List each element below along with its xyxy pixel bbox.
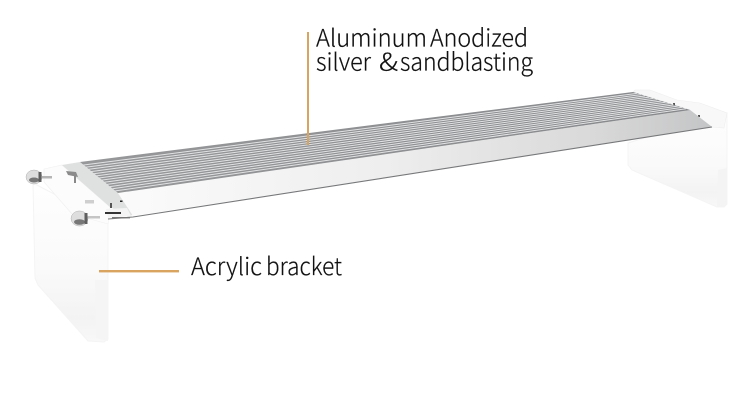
lamp: bottom edge xyxy=(108,127,712,219)
callout text: acrylic bracket: bracket xyxy=(266,247,343,282)
icon: left front screw xyxy=(71,211,100,226)
lamp: left clamp details xyxy=(66,171,131,218)
lamp body xyxy=(62,92,712,219)
callout line: bracket xyxy=(99,270,179,272)
icon: left rear screw xyxy=(26,170,52,184)
callout text: aluminum anodized: Aluminum xyxy=(316,18,427,54)
callout text: aluminum anodized: silver xyxy=(316,42,371,78)
callout text: acrylic bracket xyxy=(191,247,343,282)
lamp: white front face xyxy=(118,110,712,216)
callout text: aluminum anodized: Anodized xyxy=(430,18,528,54)
callout text: aluminum anodized: & xyxy=(379,42,399,78)
lamp: cooling fins xyxy=(80,92,690,193)
callout text: aluminum anodized: sandblasting xyxy=(400,42,533,78)
callout text: acrylic bracket: Acrylic xyxy=(191,247,262,282)
callout text: aluminum anodized xyxy=(316,18,533,78)
callout line: aluminum xyxy=(307,32,309,145)
lamp: right silver strip xyxy=(633,92,712,127)
acrylic bracket: left xyxy=(33,165,110,342)
lamp: silver end plate xyxy=(62,162,133,216)
acrylic bracket: right xyxy=(628,90,727,207)
